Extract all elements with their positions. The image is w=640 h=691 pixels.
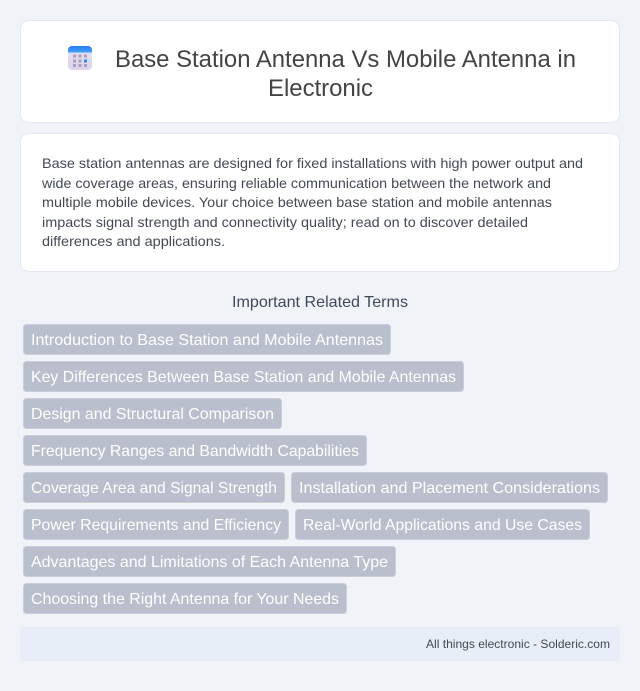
tag: Frequency Ranges and Bandwidth Capabilities [31,443,359,460]
tag [292,472,608,502]
text block: intro: multiple mobile devices. Your choice between base station and mobile antennas [42,194,552,210]
icon: calendar [68,46,92,70]
text block: intro: wide coverage areas, ensuring reliable communication between the network and [41,175,551,191]
tag: Advantages and Limitations of Each Antenna Type [31,554,388,571]
tag list [24,324,608,614]
tag [24,472,284,502]
panel: intro paragraph [20,134,620,272]
tag [24,398,282,428]
tag [24,362,464,392]
tag: Real-World Applications and Use Cases [303,517,582,534]
tag: Key Differences Between Base Station and Mobile Antennas [31,369,456,386]
footer [20,627,620,661]
tag [24,584,346,614]
tag [24,324,390,354]
title: Electronic [268,75,373,102]
tag: Installation and Placement Considerations [299,480,600,497]
tag: Design and Structural Comparison [31,406,274,423]
tag: Coverage Area and Signal Strength [31,480,277,497]
tag [24,436,366,466]
tag: Introduction to Base Station and Mobile Antennas [31,332,383,349]
heading: related terms: Important Related Terms [232,294,408,311]
text block: intro: Base station antennas are designed for fixed installations with high power output and [42,155,583,171]
tag [296,510,590,540]
text block: intro: differences and applications. [42,233,225,249]
panel: title card [20,20,620,122]
tag [24,510,288,540]
tag [24,546,396,576]
footer text: All things electronic - Solderic.com [426,637,610,651]
title: Base Station Antenna Vs Mobile Antenna in [115,46,576,73]
text block: intro: impacts signal strength and connectivity quality; read on to discover detailed [42,214,528,230]
tag: Power Requirements and Efficiency [31,517,281,534]
tag: Choosing the Right Antenna for Your Needs [31,591,339,608]
